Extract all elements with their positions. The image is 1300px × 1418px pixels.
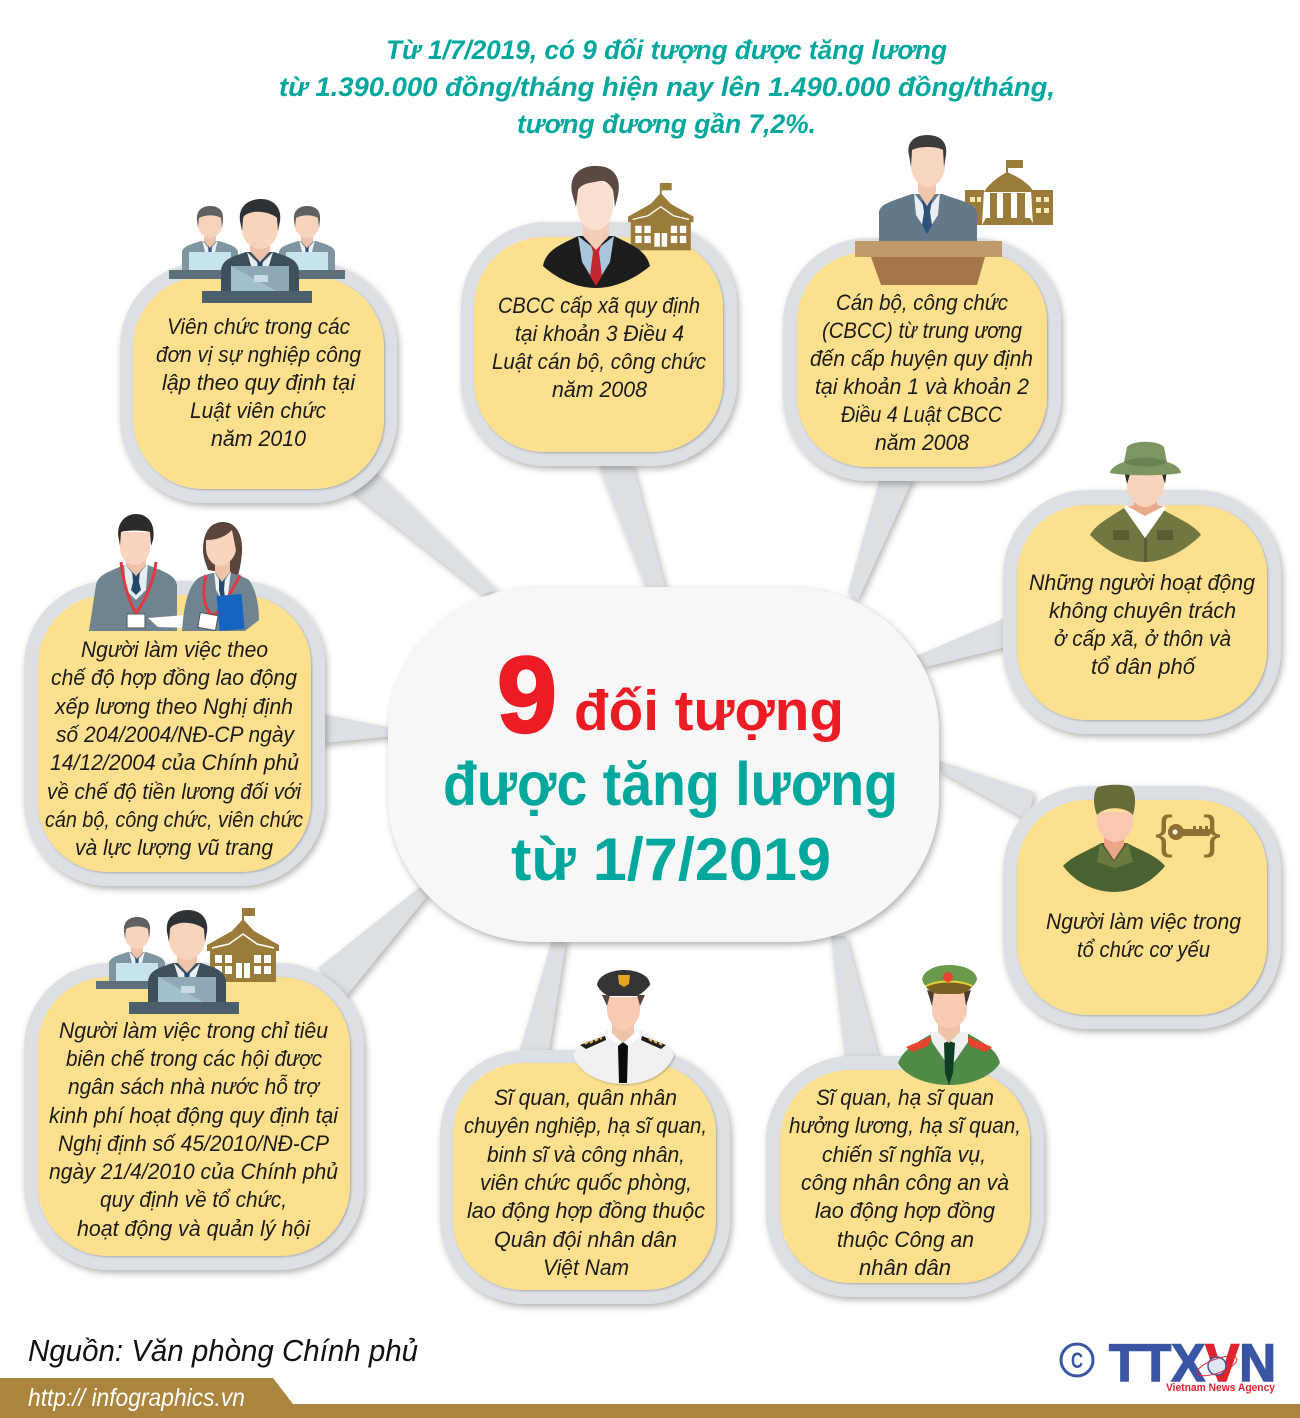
heading: được tăng lương từ 1/7/2019 [443, 750, 898, 893]
panel: CBCC trung ương [783, 135, 1061, 481]
heading: được tăng lương từ 1/7/2019: được tăng lương [443, 750, 898, 818]
text: công an: Sĩ quan, hạ sĩ quan [816, 1085, 994, 1110]
logo: TTXVN: Vietnam News Agency [1166, 1382, 1276, 1394]
connectors from center to panels [318, 463, 1034, 1058]
text: CBCC cấp xã: CBCC cấp xã quy định [498, 293, 700, 318]
panel: quân đội [440, 970, 730, 1304]
text: quân đội: chuyên nghiệp, hạ sĩ quan, [464, 1113, 707, 1138]
text: hội được ngân sách hỗ trợ: Nghị định số 45/2010/NĐ-CP [58, 1131, 329, 1156]
heading: 9 đối tượng: đối tượng [574, 679, 844, 743]
text: công an: lao động hợp đồng [815, 1198, 995, 1223]
text: CBCC cấp xã: tại khoản 3 Điều 4 [515, 321, 684, 346]
panel: CBCC cấp xã [461, 166, 737, 466]
text: CBCC trung ương: đến cấp huyện quy định [810, 346, 1033, 371]
logo: TTXVN: TTXVN [1109, 1334, 1276, 1393]
panel: công an [766, 965, 1044, 1297]
text: hội được ngân sách hỗ trợ: ngày 21/4/2010 của Chính phủ [49, 1159, 338, 1184]
heading: 9 đối tượng: 9 [497, 634, 557, 755]
icon: key in braces [1155, 806, 1221, 858]
title: từ 1.390.000 đồng/tháng hiện nay lên 1.490.000 đồng/tháng, [279, 72, 1055, 102]
text: quân đội: viên chức quốc phòng, [480, 1170, 692, 1195]
text: hoạt động không chuyên trách: ở cấp xã, ở thôn và [1054, 626, 1231, 651]
text: quân đội: Việt Nam [543, 1255, 629, 1280]
text: hội được ngân sách hỗ trợ: hoạt động và quản lý hội [77, 1216, 311, 1241]
icon: key in braces: } [1203, 806, 1221, 858]
panel: hội được ngân sách hỗ trợ [24, 908, 364, 1270]
text: hợp đồng lao động: số 204/2004/NĐ-CP ngày [56, 722, 296, 747]
panel: center heading [388, 587, 939, 942]
text: tổ chức cơ yếu: Người làm việc trong [1046, 909, 1241, 934]
text: viên chức: đơn vị sự nghiệp công [156, 342, 361, 367]
text: hoạt động không chuyên trách: Những người hoạt động [1029, 570, 1255, 595]
text: công an [789, 1085, 1021, 1280]
title: tương đương gần 7,2%. [517, 109, 816, 139]
text: viên chức [156, 314, 361, 451]
heading: 9 đối tượng [497, 634, 844, 755]
icon: key in braces: { [1155, 806, 1173, 858]
text: viên chức: Viên chức trong các [167, 314, 350, 339]
text: viên chức: Luật viên chức [190, 398, 326, 423]
text: hợp đồng lao động: và lực lượng vũ trang [75, 835, 273, 860]
text: hợp đồng lao động [45, 637, 303, 860]
text: viên chức: năm 2010 [211, 426, 306, 451]
title [279, 35, 1055, 139]
icon: government building [965, 160, 1053, 225]
text: hội được ngân sách hỗ trợ: kinh phí hoạt động quy định tại [49, 1103, 339, 1128]
text: hội được ngân sách hỗ trợ: biên chế trong các hội được [66, 1046, 322, 1071]
text: CBCC trung ương: năm 2008 [875, 430, 969, 455]
text: CBCC trung ương: Điều 4 Luật CBCC [841, 402, 1003, 427]
text: công an: chiến sĩ nghĩa vụ, [822, 1142, 986, 1167]
text: quân đội: Quân đội nhân dân [494, 1227, 677, 1252]
heading: được tăng lương từ 1/7/2019: từ 1/7/2019 [511, 826, 831, 893]
footer bar [0, 1378, 1300, 1418]
panel: tổ chức cơ yếu [1003, 785, 1281, 1029]
source text: Nguồn: Văn phòng Chính phủ [28, 1333, 418, 1368]
text: hoạt động không chuyên trách: tổ dân phố [1091, 654, 1197, 679]
panel: viên chức [120, 199, 397, 503]
text: hội được ngân sách hỗ trợ: ngân sách nhà nước hỗ trợ [68, 1074, 321, 1099]
text: quân đội: binh sĩ và công nhân, [487, 1142, 685, 1167]
text: hợp đồng lao động: 14/12/2004 của Chính phủ [50, 750, 299, 775]
icon: soldier with cap [1063, 785, 1165, 892]
icon: man in black suit with red tie [543, 166, 650, 288]
icon: school building [628, 183, 694, 250]
text: hợp đồng lao động: cán bộ, công chức, viên chức [45, 807, 303, 832]
icon: navy officer [573, 970, 674, 1084]
icon: police officer in green [898, 965, 1000, 1085]
text: CBCC trung ương: Cán bộ, công chức [836, 290, 1008, 315]
text: hoạt động không chuyên trách [1029, 570, 1255, 679]
text: hội được ngân sách hỗ trợ: Người làm việc trong chỉ tiêu [59, 1018, 328, 1043]
text: công an: công nhân công an và [801, 1170, 1009, 1195]
text: hợp đồng lao động: Người làm việc theo [81, 637, 268, 662]
text: CBCC trung ương: (CBCC) từ trung ương [822, 318, 1022, 343]
text: CBCC trung ương: tại khoản 1 và khoản 2 [815, 374, 1029, 399]
text: hội được ngân sách hỗ trợ [49, 1018, 339, 1241]
panel: hoạt động không chuyên trách [1003, 442, 1281, 734]
footer url: http:// infographics.vn [28, 1384, 245, 1412]
text: hợp đồng lao động: về chế độ tiền lương đối với [47, 779, 302, 804]
icon: speaker at podium [855, 135, 1002, 285]
logo: TTXVN: C [1071, 1348, 1083, 1373]
icon: school building [207, 908, 279, 982]
text: CBCC cấp xã: năm 2008 [552, 377, 647, 402]
text: hợp đồng lao động: chế độ hợp đồng lao động [51, 665, 297, 690]
text: tổ chức cơ yếu [1046, 909, 1241, 962]
text: tổ chức cơ yếu: tổ chức cơ yếu [1077, 937, 1210, 962]
text: hoạt động không chuyên trách: không chuyên trách [1049, 598, 1236, 623]
text: quân đội: lao động hợp đồng thuộc [467, 1198, 705, 1223]
text: quân đội [464, 1085, 707, 1280]
icon: three office workers with laptops [169, 199, 345, 303]
text: CBCC cấp xã: Luật cán bộ, công chức [492, 349, 706, 374]
icon: man in green hat and vest [1090, 442, 1201, 562]
text: CBCC trung ương [810, 290, 1033, 455]
text: CBCC cấp xã [492, 293, 706, 402]
icon: man and woman with lanyards [89, 514, 259, 631]
text: hợp đồng lao động: xếp lương theo Nghị định [54, 694, 293, 719]
panel: hợp đồng lao động [24, 514, 325, 886]
title: Từ 1/7/2019, có 9 đối tượng được tăng lương [386, 35, 947, 65]
text: viên chức: lập theo quy định tại [162, 370, 356, 395]
text: công an: hưởng lương, hạ sĩ quan, [789, 1113, 1021, 1138]
text: quân đội: Sĩ quan, quân nhân [494, 1085, 677, 1110]
text: công an: nhân dân [859, 1255, 951, 1280]
text: hội được ngân sách hỗ trợ: quy định về tổ chức, [100, 1187, 287, 1212]
text: công an: thuộc Công an [837, 1227, 974, 1252]
icon: two workers with laptops [96, 910, 239, 1014]
